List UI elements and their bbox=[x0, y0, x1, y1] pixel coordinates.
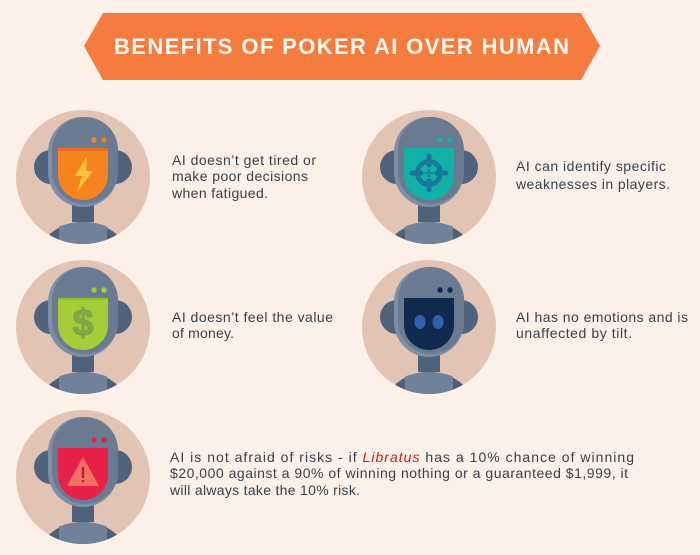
robot: dollar: $ bbox=[73, 302, 94, 343]
robot: dollar bbox=[16, 260, 150, 394]
robot: no emotions bbox=[362, 260, 496, 394]
text: weaknesses: AI can identify specific bbox=[516, 158, 666, 174]
robot: warning bbox=[16, 410, 150, 544]
text: risk bbox=[169, 449, 634, 498]
text: risk: $20,000 against a 90% of winning nothing or a guaranteed $1,999, it bbox=[170, 465, 628, 481]
text: fatigue: AI doesn’t get tired or bbox=[172, 152, 316, 168]
text: money: of money. bbox=[172, 325, 234, 341]
text: weaknesses: weaknesses in players. bbox=[515, 176, 670, 192]
text: risk: will always take the 10% risk. bbox=[169, 482, 360, 498]
text: money: AI doesn’t feel the value bbox=[172, 309, 333, 325]
text: emotions: AI has no emotions and is bbox=[516, 309, 688, 325]
title banner bbox=[84, 13, 600, 80]
text: money bbox=[172, 309, 333, 341]
title banner: BENEFITS OF POKER AI OVER HUMAN bbox=[114, 34, 569, 59]
robot: lightning bolt bbox=[16, 110, 150, 244]
text: emotions bbox=[516, 309, 688, 341]
text: fatigue: make poor decisions bbox=[172, 168, 308, 184]
robot: target bbox=[362, 110, 496, 244]
text: fatigue: when fatigued. bbox=[171, 185, 268, 201]
text: weaknesses bbox=[515, 158, 670, 192]
text: risk: AI is not afraid of risks - if Libratus has a 10% chance of winning bbox=[170, 449, 634, 465]
text: fatigue bbox=[171, 152, 316, 201]
text: emotions: unaffected by tilt. bbox=[516, 325, 632, 341]
